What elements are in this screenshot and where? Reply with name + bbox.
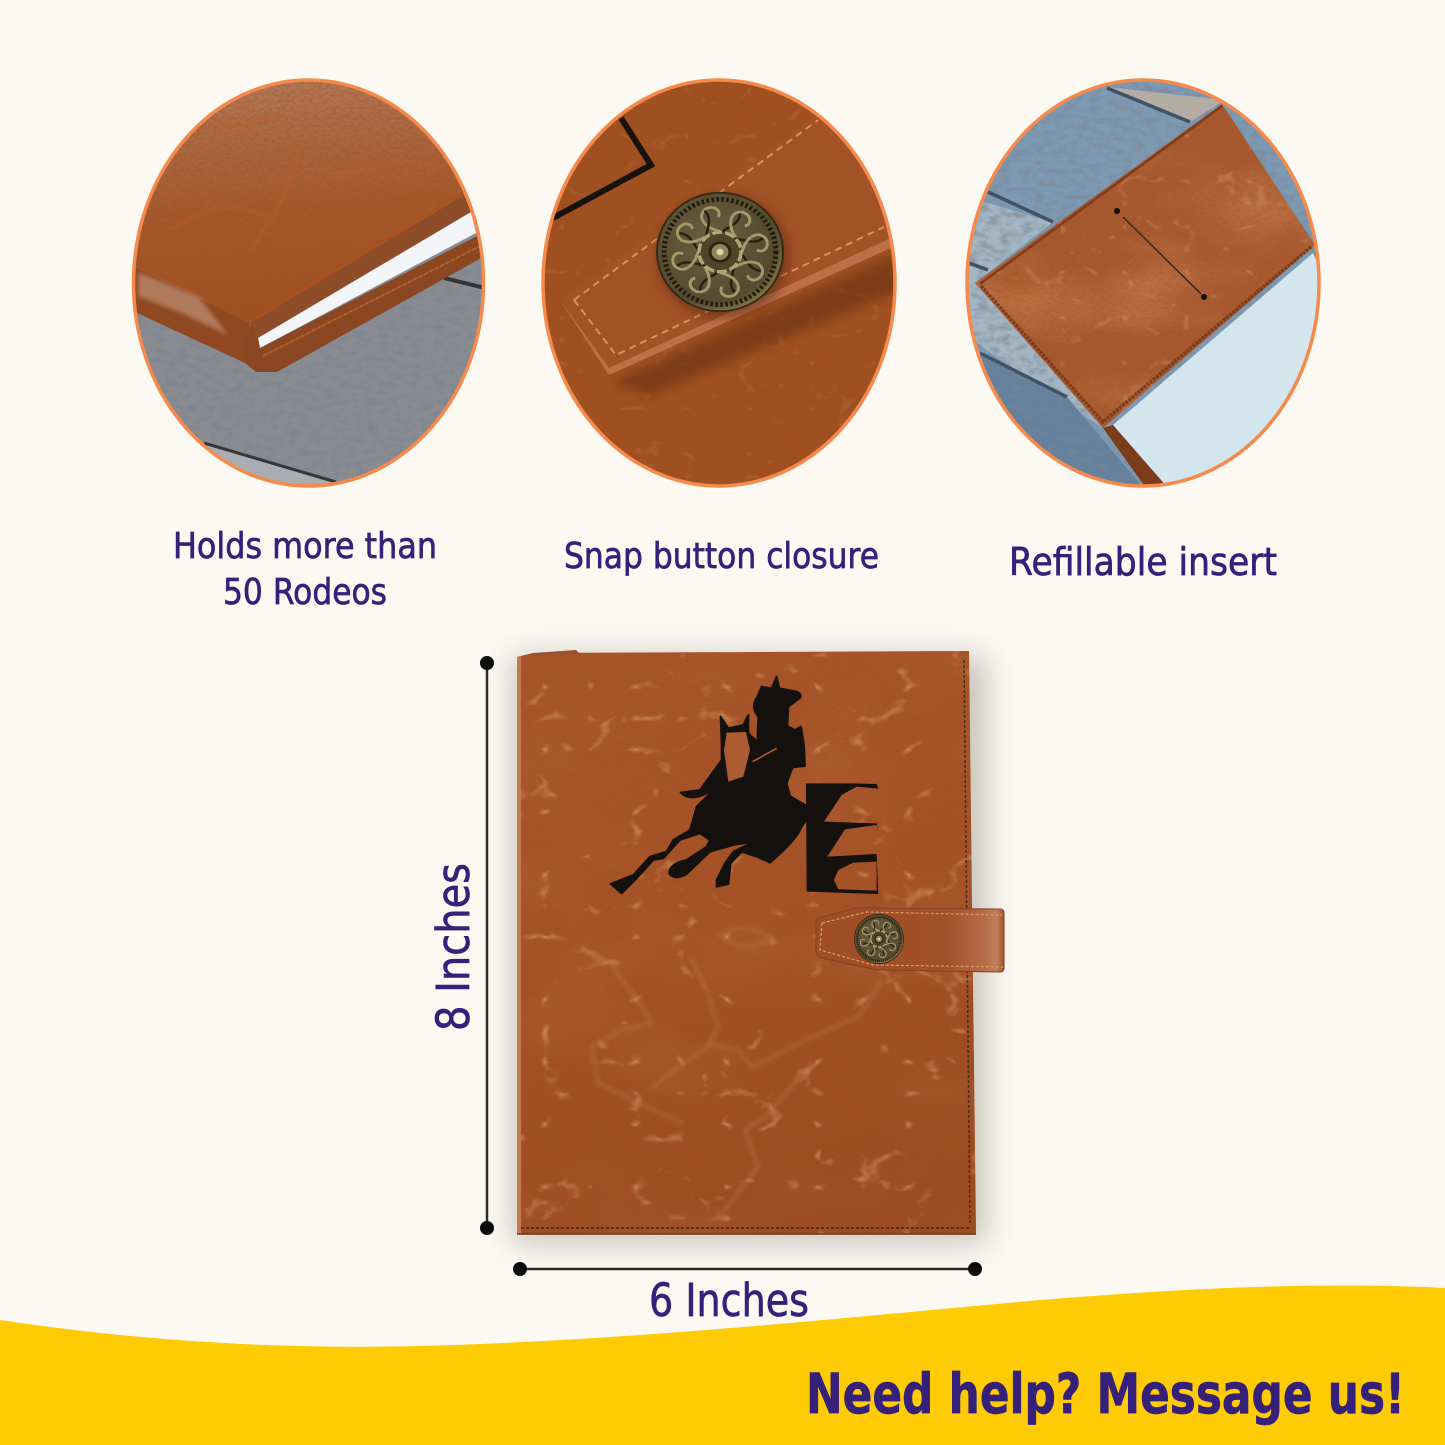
panel: leather cover close-up [130, 60, 490, 492]
icon: brass snap button [657, 193, 789, 318]
caption: holds more than 50 rodeos: Holds more than [173, 526, 437, 567]
caption: holds more than 50 rodeos: 50 Rodeos [223, 572, 387, 613]
panel: refillable insert close-up [960, 78, 1330, 490]
emblem: barrel racer silhouette [611, 677, 878, 894]
strap with snap button [816, 908, 1004, 972]
icon: button [854, 914, 904, 964]
panel: journal cover [512, 650, 1004, 1244]
engraved line [553, 118, 651, 218]
width dimension line [513, 1262, 982, 1276]
height label: 8 Inches [427, 863, 480, 1031]
footer banner [0, 1285, 1445, 1445]
height dimension line [480, 656, 494, 1235]
caption: refillable insert: Refillable insert [1009, 540, 1277, 584]
caption: snap button closure: Snap button closure [564, 536, 879, 577]
width label: 6 Inches [649, 1274, 809, 1327]
leather wrinkles [592, 928, 882, 1213]
caption: holds more than 50 rodeos [173, 526, 437, 613]
panel: snap button close-up [540, 78, 900, 490]
